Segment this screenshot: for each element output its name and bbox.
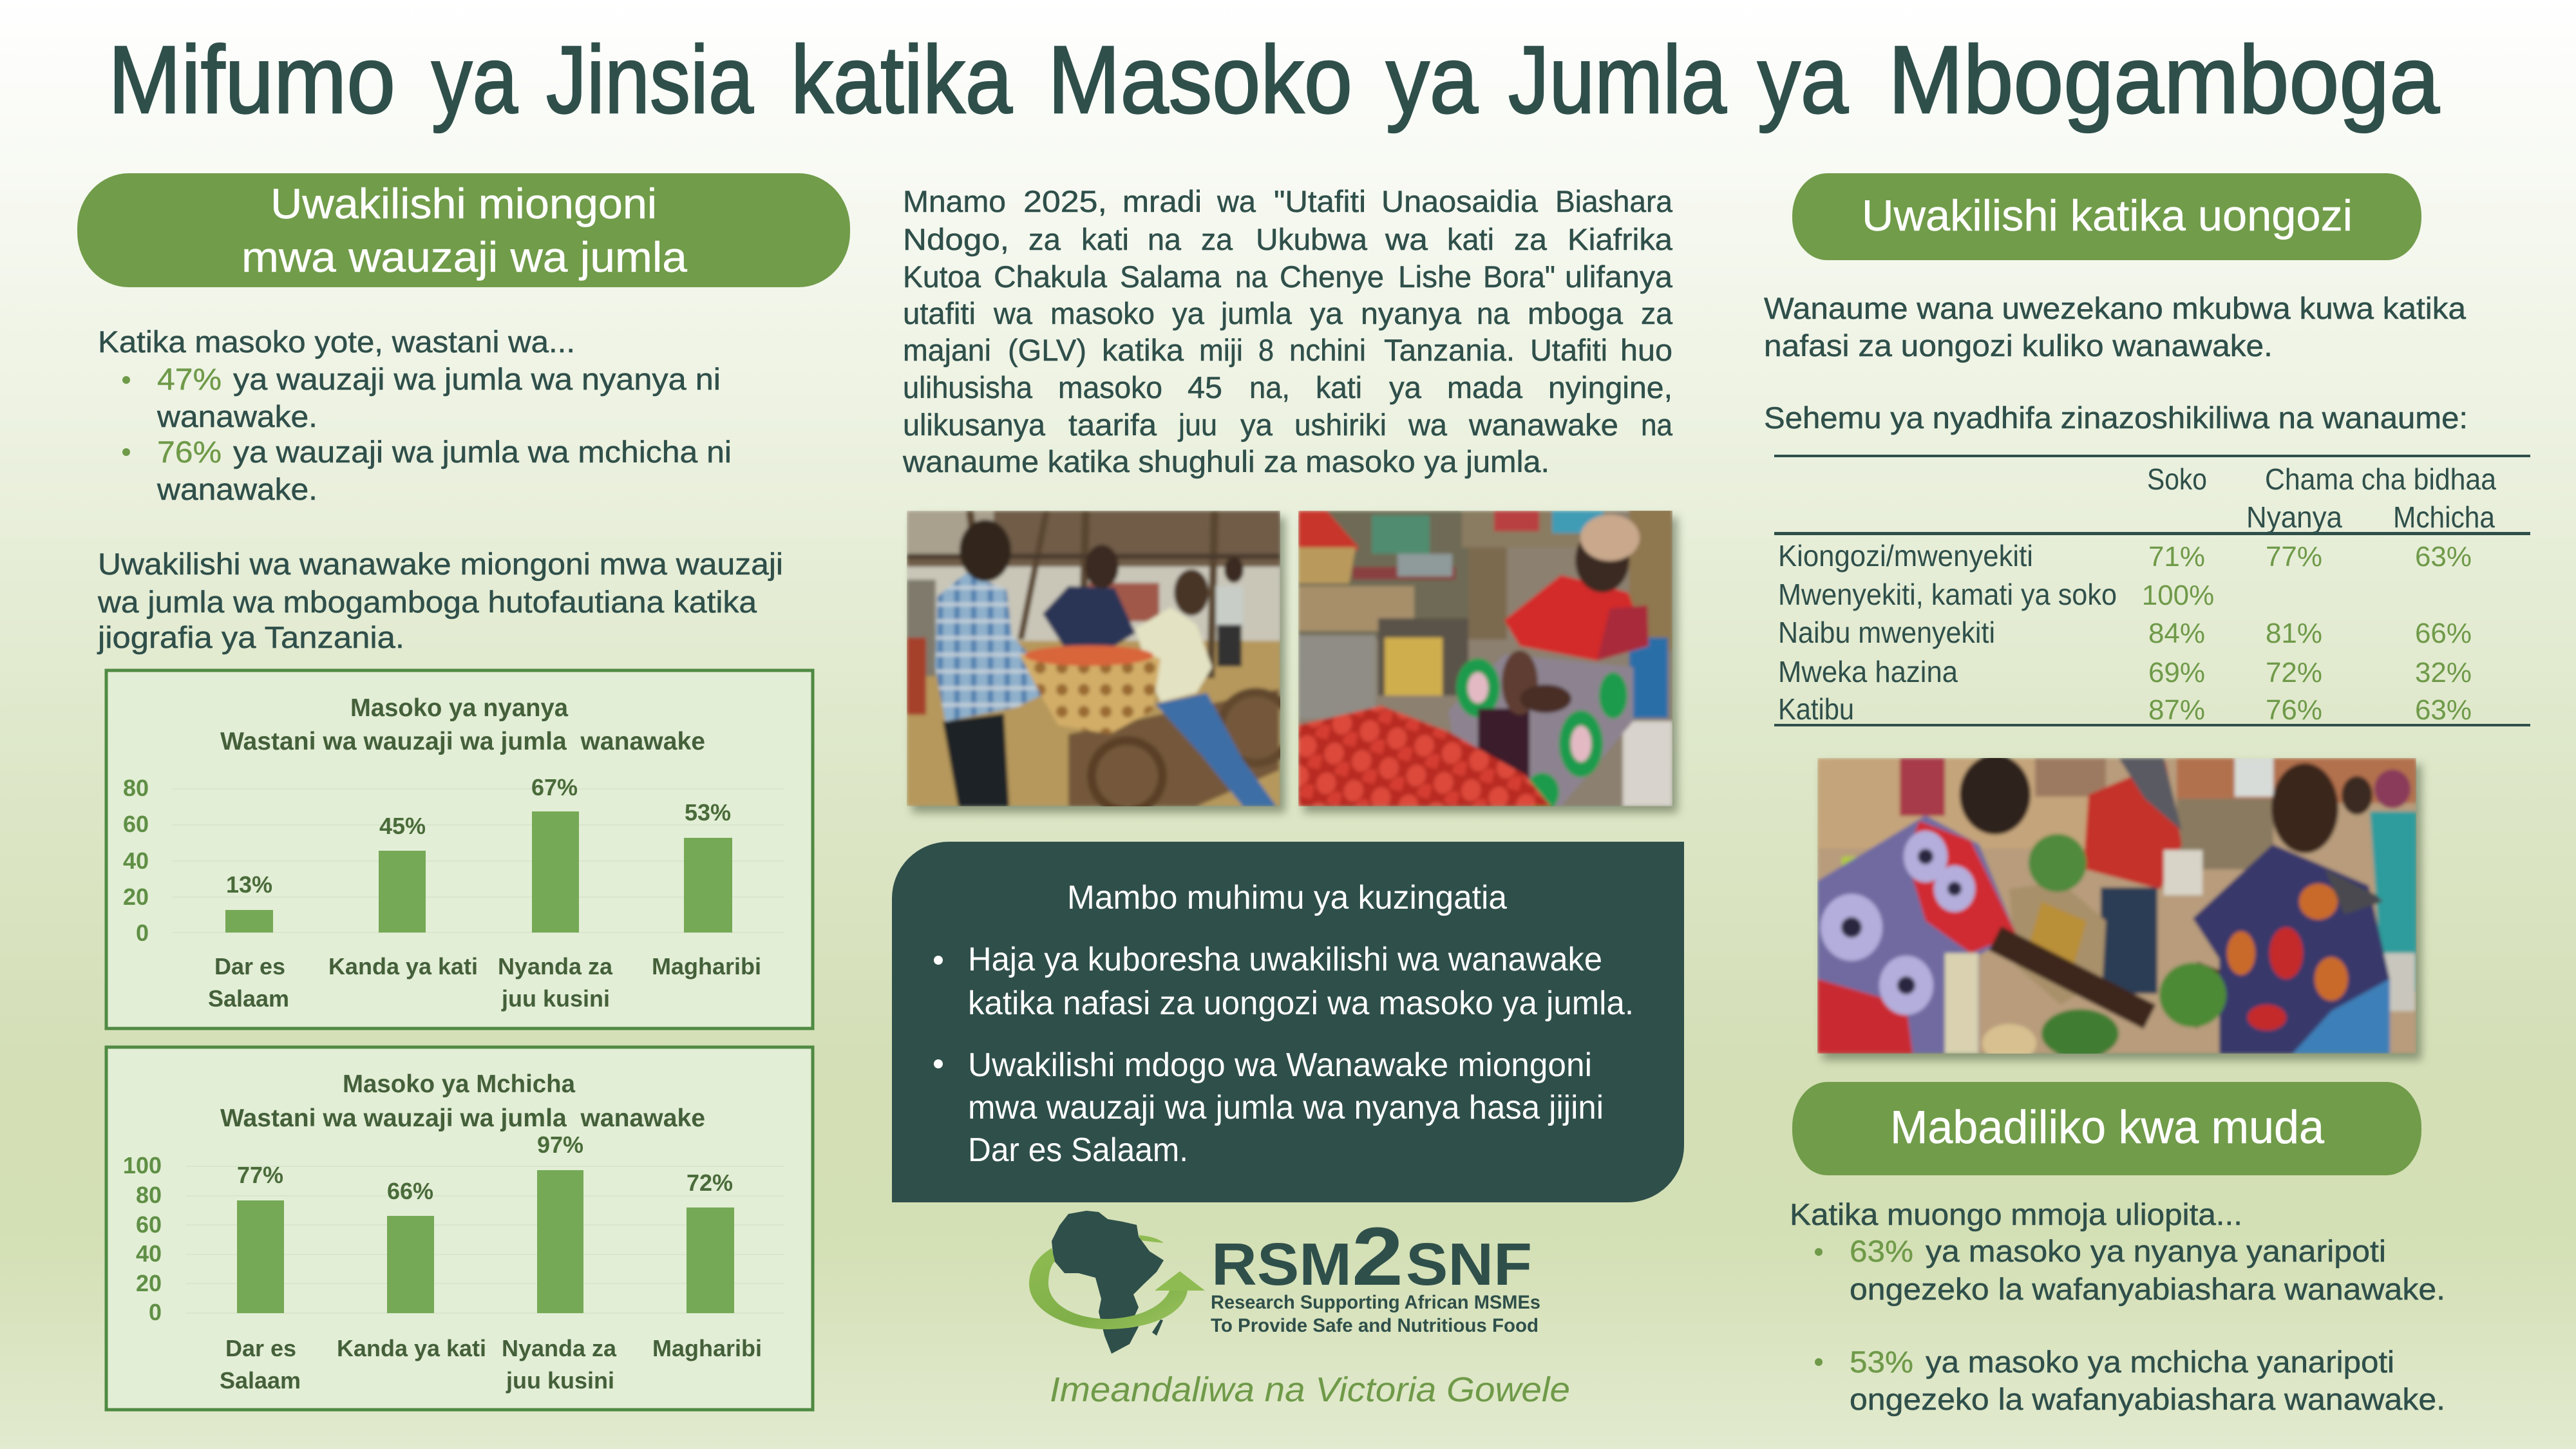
- text block: study introduction: 8: [1258, 333, 1274, 367]
- text block: study introduction: ya: [1310, 296, 1343, 330]
- text block: averages across markets: ya wauzaji wa jumla wa mchicha ni: [233, 435, 732, 469]
- bar chart: tomato markets: Magharibi: [652, 953, 761, 980]
- table: share of positions held by men: Naibu mwenyekiti: [1778, 616, 1995, 649]
- text block: study introduction: Chenye: [1280, 260, 1384, 294]
- text block: study introduction: masoko: [1050, 296, 1155, 330]
- text block: averages across markets: Katika masoko yote, wastani wa...: [98, 325, 575, 359]
- heading pill: representation among wholesalers: [77, 173, 850, 287]
- icon: Africa with circular arrow: [1029, 1211, 1205, 1354]
- heading pill: representation in leadership: [1792, 173, 2421, 260]
- bar chart: amaranth markets: juu kusini: [506, 1367, 614, 1394]
- heading pill: changes over time: Mabadiliko kwa muda: [1890, 1102, 2325, 1153]
- text block: study introduction: na: [1148, 222, 1182, 256]
- table: share of positions held by men: [1774, 455, 2530, 726]
- text block: study introduction: ushiriki: [1294, 408, 1387, 442]
- title: [108, 26, 2439, 133]
- text block: men more likely to hold leadership: Sehemu ya nyadhifa zinazoshikiliwa na wanaume:: [1764, 401, 2468, 435]
- text block: averages across markets: 47%: [157, 362, 222, 396]
- text block: study introduction: za: [1641, 296, 1673, 330]
- table: share of positions held by men: 84%: [2148, 618, 2205, 649]
- table: share of positions held by men: 32%: [2415, 657, 2472, 688]
- text block: study introduction: wa: [1385, 222, 1428, 256]
- table: share of positions held by men: 76%: [2266, 694, 2322, 726]
- bar chart: amaranth markets: 66%: [387, 1178, 433, 1204]
- table: share of positions held by men: Katibu: [1778, 692, 1854, 726]
- text block: changes in the last decade: ongezeko la wafanyabiashara wanawake.: [1850, 1272, 2445, 1306]
- text block: study introduction: ya: [1240, 408, 1273, 442]
- text block: study introduction: Tanzania.: [1384, 333, 1515, 367]
- text block: study introduction: wanawake: [1468, 408, 1618, 442]
- table: share of positions held by men: 71%: [2148, 541, 2205, 573]
- bar chart: tomato markets: 45%: [379, 813, 426, 839]
- text block: study introduction: Mnamo: [903, 184, 1006, 218]
- text block: averages across markets: wanawake.: [156, 399, 317, 433]
- text block: study introduction: taarifa: [1068, 408, 1157, 442]
- text block: study introduction: 45: [1188, 370, 1222, 404]
- text block: study introduction: nchini: [1289, 333, 1366, 367]
- bar chart: amaranth markets: 100: [123, 1152, 162, 1179]
- table: share of positions held by men: 87%: [2148, 694, 2205, 726]
- callout panel: key considerations: katika nafasi za uongozi wa masoko ya jumla.: [968, 985, 1634, 1022]
- table: share of positions held by men: Chama cha bidhaa: [2265, 462, 2496, 496]
- bar chart: amaranth markets: 0: [149, 1299, 162, 1325]
- bar chart: tomato markets: Wastani wa wauzaji wa jumla wanawake: [220, 728, 705, 755]
- logo: RSM2SNF: To Provide Safe and Nutritious Food: [1211, 1315, 1539, 1336]
- text block: study introduction: Kutoa: [903, 260, 981, 294]
- logo: RSM2SNF: [1029, 1211, 1540, 1354]
- text block: study introduction: masoko: [1058, 370, 1162, 404]
- table: share of positions held by men: Mchicha: [2393, 500, 2495, 534]
- table: share of positions held by men: 66%: [2415, 618, 2472, 649]
- heading pill: representation in leadership: Uwakilishi katika uongozi: [1862, 191, 2353, 240]
- title: ya: [431, 26, 518, 133]
- table: share of positions held by men: Mwenyekiti, kamati ya soko: [1778, 578, 2117, 611]
- bar chart: tomato markets: Salaam: [208, 985, 289, 1012]
- table: share of positions held by men: 63%: [2415, 694, 2472, 726]
- bar chart: amaranth markets: Nyanda za: [502, 1335, 617, 1361]
- text block: study introduction: ya: [1389, 370, 1422, 404]
- text block: study introduction: mboga: [1528, 296, 1624, 330]
- photo: women trading amaranth greens: [1817, 755, 2421, 1063]
- text block: geographic variation: jiografia ya Tanzania.: [97, 620, 404, 654]
- table: share of positions held by men: 69%: [2148, 657, 2205, 688]
- text block: study introduction: Chakula: [994, 260, 1108, 294]
- callout panel: key considerations: Haja ya kuboresha uwakilishi wa wanawake: [968, 941, 1602, 978]
- text block: geographic variation: Uwakilishi wa wanawake miongoni mwa wauzaji: [98, 547, 783, 581]
- logo: RSM2SNF: Research Supporting African MSMEs: [1211, 1292, 1540, 1313]
- table: share of positions held by men: 100%: [2142, 580, 2214, 611]
- text block: men more likely to hold leadership: [1764, 291, 2468, 435]
- bar chart: amaranth markets: Salaam: [220, 1367, 301, 1394]
- byline: Imeandaliwa na Victoria Gowele: [1050, 1370, 1570, 1409]
- text block: study introduction: majani: [903, 333, 991, 367]
- photo: woman selling tomatoes: [1298, 509, 1678, 813]
- table: share of positions held by men: 72%: [2266, 657, 2322, 688]
- bar chart: tomato markets: Nyanda za: [498, 953, 613, 980]
- text block: averages across markets: 76%: [157, 435, 222, 469]
- text block: study introduction: Biashara: [1555, 184, 1673, 218]
- text block: study introduction: "Utafiti: [1274, 184, 1366, 218]
- callout panel: key considerations: mwa wauzaji wa jumla wa nyanya hasa jijini: [968, 1089, 1604, 1126]
- text block: changes in the last decade: [1790, 1197, 2445, 1416]
- bar chart: tomato markets: 0: [136, 920, 149, 946]
- table: share of positions held by men: Kiongozi/mwenyekiti: [1778, 539, 2033, 573]
- bar chart: amaranth markets: Wastani wa wauzaji wa jumla wanawake: [220, 1104, 705, 1132]
- title: ya: [1386, 26, 1478, 133]
- text block: study introduction: [902, 184, 1673, 478]
- text block: study introduction: mradi: [1122, 184, 1202, 218]
- text block: men more likely to hold leadership: nafasi za uongozi kuliko wanawake.: [1764, 328, 2273, 363]
- callout panel: key considerations: Dar es Salaam.: [968, 1132, 1188, 1169]
- text block: study introduction: utafiti: [903, 296, 976, 330]
- heading pill: changes over time: [1792, 1082, 2421, 1175]
- text block: study introduction: 2025,: [1023, 184, 1107, 218]
- photo: men loading a basket of tomatoes on a motorbike: [907, 511, 1291, 813]
- bar chart: tomato markets: [106, 670, 813, 1028]
- callout panel: key considerations: [892, 842, 1684, 1202]
- text block: study introduction: Bora": [1483, 260, 1555, 294]
- text block: study introduction: na: [1641, 408, 1673, 442]
- text block: changes in the last decade: 53%: [1850, 1345, 1913, 1379]
- text block: study introduction: wa: [993, 296, 1033, 330]
- bar chart: amaranth markets: 72%: [687, 1170, 733, 1196]
- bar chart: amaranth markets: 80: [136, 1182, 162, 1208]
- text block: study introduction: (GLV): [1008, 333, 1086, 367]
- text block: averages across markets: [98, 325, 732, 506]
- text block: study introduction: ulikusanya: [903, 408, 1046, 442]
- table: share of positions held by men: 63%: [2415, 541, 2472, 573]
- logo: RSM2SNF: SNF: [1406, 1231, 1532, 1298]
- text block: study introduction: na,: [1249, 370, 1290, 404]
- callout panel: key considerations: Uwakilishi mdogo wa Wanawake miongoni: [968, 1046, 1592, 1084]
- table: share of positions held by men: 77%: [2266, 541, 2322, 573]
- text block: study introduction: kati: [1081, 222, 1129, 256]
- bar chart: amaranth markets: Dar es: [225, 1335, 296, 1361]
- bar chart: amaranth markets: 77%: [237, 1162, 283, 1188]
- bar chart: tomato markets: 13%: [226, 871, 272, 898]
- text block: study introduction: kati: [1316, 370, 1362, 404]
- text block: study introduction: na: [1235, 260, 1268, 294]
- text block: study introduction: wanaume katika shughuli za masoko ya jumla.: [902, 444, 1549, 478]
- text block: study introduction: mada: [1447, 370, 1523, 404]
- table: share of positions held by men: 81%: [2266, 618, 2322, 649]
- bar chart: amaranth markets: 20: [136, 1270, 162, 1296]
- text block: study introduction: ulifanya: [1565, 260, 1673, 294]
- text block: men more likely to hold leadership: Wanaume wana uwezekano mkubwa kuwa katika: [1764, 291, 2467, 325]
- text block: study introduction: Salama: [1120, 260, 1222, 294]
- heading pill: representation among wholesalers: Uwakilishi miongoni: [270, 180, 657, 227]
- bar chart: amaranth markets: Magharibi: [652, 1335, 762, 1361]
- bar chart: tomato markets: 53%: [685, 799, 731, 826]
- text block: study introduction: nyanya: [1361, 296, 1462, 330]
- text block: study introduction: miji: [1199, 333, 1243, 367]
- text block: study introduction: Kiafrika: [1567, 222, 1673, 256]
- text block: changes in the last decade: ya masoko ya mchicha yanaripoti: [1926, 1345, 2394, 1379]
- title: Jumla: [1508, 26, 1727, 133]
- text block: study introduction: kati: [1447, 222, 1494, 256]
- text block: changes in the last decade: ya masoko ya nyanya yanaripoti: [1926, 1234, 2386, 1268]
- text block: geographic variation: wa jumla wa mbogamboga hutofautiana katika: [97, 585, 757, 619]
- text block: averages across markets: ya wauzaji wa jumla wa nyanya ni: [233, 362, 721, 396]
- bar chart: amaranth markets: [106, 1047, 813, 1410]
- bar chart: tomato markets: Masoko ya nyanya: [350, 694, 568, 722]
- bar chart: amaranth markets: Masoko ya Mchicha: [343, 1070, 575, 1098]
- title: Masoko: [1048, 26, 1352, 133]
- bar chart: tomato markets: juu kusini: [501, 985, 610, 1012]
- text block: study introduction: Ukubwa: [1256, 222, 1368, 256]
- text block: changes in the last decade: Katika muongo mmoja uliopita...: [1790, 1197, 2242, 1231]
- title: Mbogamboga: [1888, 26, 2439, 133]
- callout panel: key considerations: Mambo muhimu ya kuzingatia: [1067, 879, 1507, 916]
- bar chart: tomato markets: Kanda ya kati: [328, 953, 478, 980]
- bar chart: tomato markets: 20: [123, 884, 149, 910]
- bar chart: tomato markets: 40: [123, 848, 149, 874]
- logo: RSM2SNF: 2: [1352, 1211, 1403, 1303]
- bar chart: amaranth markets: 97%: [537, 1132, 583, 1158]
- text block: study introduction: wa: [1408, 408, 1448, 442]
- title: Jinsia: [546, 26, 753, 133]
- text block: study introduction: jumla: [1220, 296, 1293, 330]
- text block: study introduction: za: [1514, 222, 1548, 256]
- logo: RSM2SNF: RSM: [1211, 1231, 1352, 1298]
- table: share of positions held by men: Mweka hazina: [1778, 655, 1958, 688]
- text block: study introduction: juu: [1177, 408, 1217, 442]
- text block: study introduction: za: [1028, 222, 1061, 256]
- text block: study introduction: katika: [1102, 333, 1184, 367]
- heading pill: representation among wholesalers: mwa wauzaji wa jumla: [242, 233, 687, 281]
- text block: study introduction: nyingine,: [1548, 370, 1672, 404]
- text block: study introduction: Lishe: [1398, 260, 1472, 294]
- bar chart: amaranth markets: 60: [136, 1211, 162, 1238]
- text block: study introduction: Ndogo,: [903, 222, 1009, 256]
- text block: study introduction: huo: [1620, 333, 1672, 367]
- title: Mifumo: [108, 26, 395, 133]
- text block: geographic variation: [97, 547, 783, 654]
- bar chart: tomato markets: 60: [123, 811, 149, 837]
- text block: study introduction: ya: [1172, 296, 1205, 330]
- text block: study introduction: Utafiti: [1530, 333, 1607, 367]
- bar chart: amaranth markets: 40: [136, 1240, 162, 1267]
- bar chart: tomato markets: 67%: [531, 774, 578, 800]
- text block: study introduction: Unaosaidia: [1381, 184, 1539, 218]
- title: katika: [791, 26, 1012, 133]
- bar chart: amaranth markets: Kanda ya kati: [337, 1335, 486, 1361]
- text block: study introduction: za: [1201, 222, 1233, 256]
- text block: study introduction: wa: [1217, 184, 1256, 218]
- title: ya: [1757, 26, 1848, 133]
- text block: study introduction: na: [1477, 296, 1510, 330]
- text block: changes in the last decade: ongezeko la wafanyabiashara wanawake.: [1850, 1382, 2445, 1416]
- table: share of positions held by men: Nyanya: [2246, 500, 2342, 534]
- bar chart: tomato markets: 80: [123, 775, 149, 801]
- text block: study introduction: ulihusisha: [903, 370, 1033, 404]
- bar chart: tomato markets: Dar es: [214, 953, 285, 980]
- text block: averages across markets: wanawake.: [156, 472, 317, 506]
- text block: changes in the last decade: 63%: [1850, 1234, 1913, 1268]
- table: share of positions held by men: Soko: [2147, 462, 2207, 496]
